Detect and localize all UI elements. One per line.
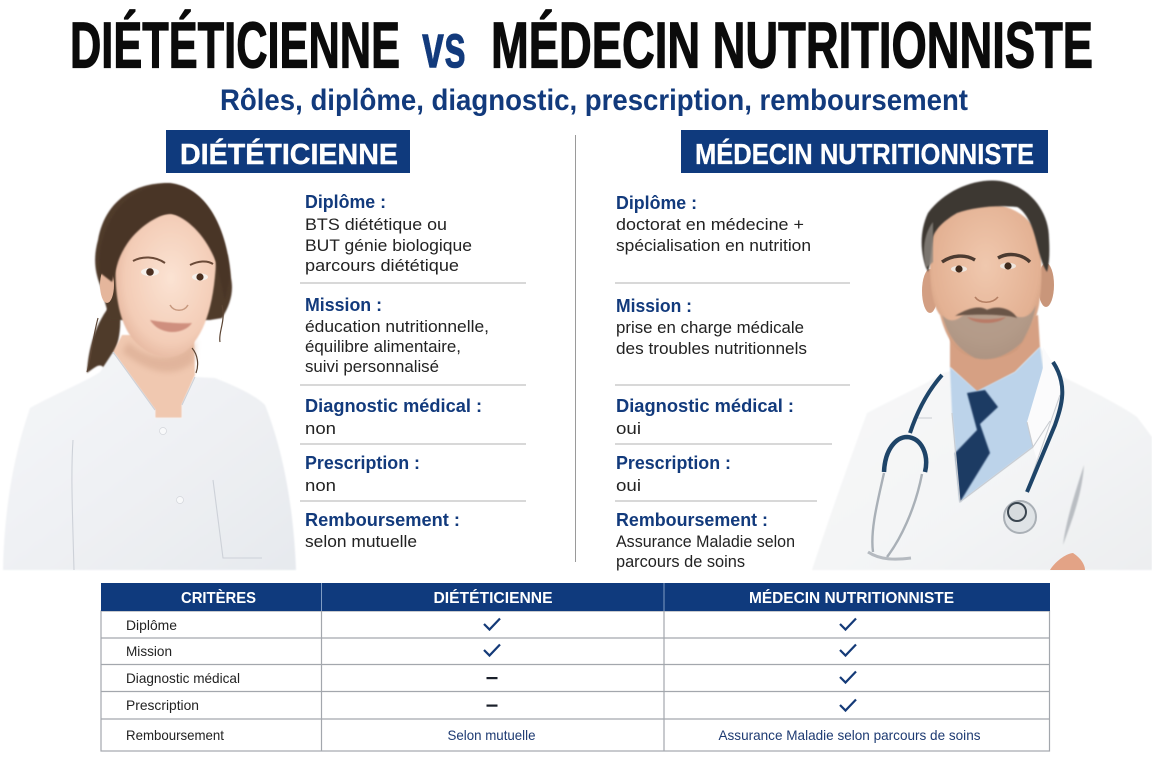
brows [942,255,1030,262]
coat buttons [160,428,184,504]
portrait: médecin [812,181,1152,570]
médecin column marks [718,618,980,743]
row labels: Remboursement [126,727,224,743]
diplôme: doctorat en médecine + [616,215,804,234]
diplôme: parcours diététique [305,256,459,275]
title: DIÉTÉTICIENNE [70,8,400,82]
diplôme [305,191,472,275]
brows [133,257,213,265]
coat fold shading [1063,465,1084,545]
prescription: non [305,476,336,495]
diplôme [616,192,811,255]
portrait: diététicienne [3,183,296,570]
loose strands [87,305,223,373]
table header [101,583,1050,611]
diagnostic médical: oui [616,419,641,438]
beard [942,305,1036,359]
diplôme: spécialisation en nutrition [616,236,811,255]
diagnostic médical: Diagnostic médical : [305,395,482,416]
mouth [150,320,192,332]
neck [950,315,1040,392]
subtitle: Rôles, diplôme, diagnostic, prescription, remboursement [220,84,968,117]
diagnostic médical [305,395,482,438]
temple grey [924,222,933,268]
remboursement: selon mutuelle [305,532,417,551]
neck [113,335,195,418]
diplôme: Diplôme : [305,191,386,212]
tie [955,390,998,502]
row labels: Mission [126,643,172,659]
coat [812,347,1152,570]
remboursement [305,509,460,551]
remboursement: Assurance Maladie selon [616,532,795,551]
title: vs [422,12,466,82]
lapels [1027,347,1063,470]
diplôme: Diplôme : [616,192,697,213]
hair [922,181,1049,272]
ear [100,267,114,303]
badge: médecin nutritionniste [681,130,1048,173]
panel: diététicienne details [300,191,526,551]
row labels: Prescription [126,697,199,713]
mission: suivi personnalisé [305,357,439,376]
face [930,203,1042,359]
badge: diététicienne [166,130,410,173]
remboursement: parcours de soins [616,552,745,571]
row labels: Diagnostic médical [126,670,240,686]
prescription [305,452,420,495]
ears [922,269,938,313]
hair back [95,183,232,320]
stethoscope [868,362,1062,559]
row labels [126,617,240,743]
mission: Mission : [305,294,382,315]
remboursement: Remboursement : [305,509,460,530]
prescription: Prescription : [305,452,420,473]
table header: DIÉTÉTICIENNE [434,590,552,607]
table header: MÉDECIN NUTRITIONNISTE [749,590,954,607]
remboursement: Remboursement : [616,509,768,530]
eyes [141,268,208,281]
badge: diététicienne: DIÉTÉTICIENNE [180,137,398,171]
mission: prise en charge médicale [616,318,804,337]
badge: médecin nutritionniste: MÉDECIN NUTRITIONNISTE [695,137,1034,171]
diplôme: BUT génie biologique [305,236,472,255]
mission: Mission : [616,295,692,316]
diplôme: BTS diététique ou [305,215,447,234]
mission [305,294,489,376]
shirt [950,347,1043,502]
hair front [99,184,230,300]
coat [3,352,296,570]
coat seams [72,352,262,570]
ponytail [87,303,120,373]
diététicienne column marks: Selon mutuelle [448,727,536,743]
médecin column marks: Assurance Maladie selon parcours de soins [718,727,980,743]
crossed hand [1050,553,1085,570]
prescription: oui [616,476,641,495]
mission [616,295,807,358]
nose [170,305,188,310]
title [70,8,1093,82]
diagnostic médical [616,395,794,438]
eyes [951,262,1016,273]
prescription [616,452,731,495]
nose [975,297,998,302]
remboursement [616,509,795,571]
lapel notches [917,395,1060,502]
moustache and mouth [955,308,1017,318]
mission: des troubles nutritionnels [616,339,807,358]
neck shadow [122,340,196,372]
panel: médecin details [615,192,850,571]
comparison table [101,583,1050,751]
mission: équilibre alimentaire, [305,337,461,356]
diététicienne column marks [448,618,536,743]
table header: CRITÈRES [181,590,256,607]
prescription: Prescription : [616,452,731,473]
face [116,214,216,357]
mission: éducation nutritionnelle, [305,317,489,336]
diagnostic médical: Diagnostic médical : [616,395,794,416]
diagnostic médical: non [305,419,336,438]
row labels: Diplôme [126,617,177,633]
